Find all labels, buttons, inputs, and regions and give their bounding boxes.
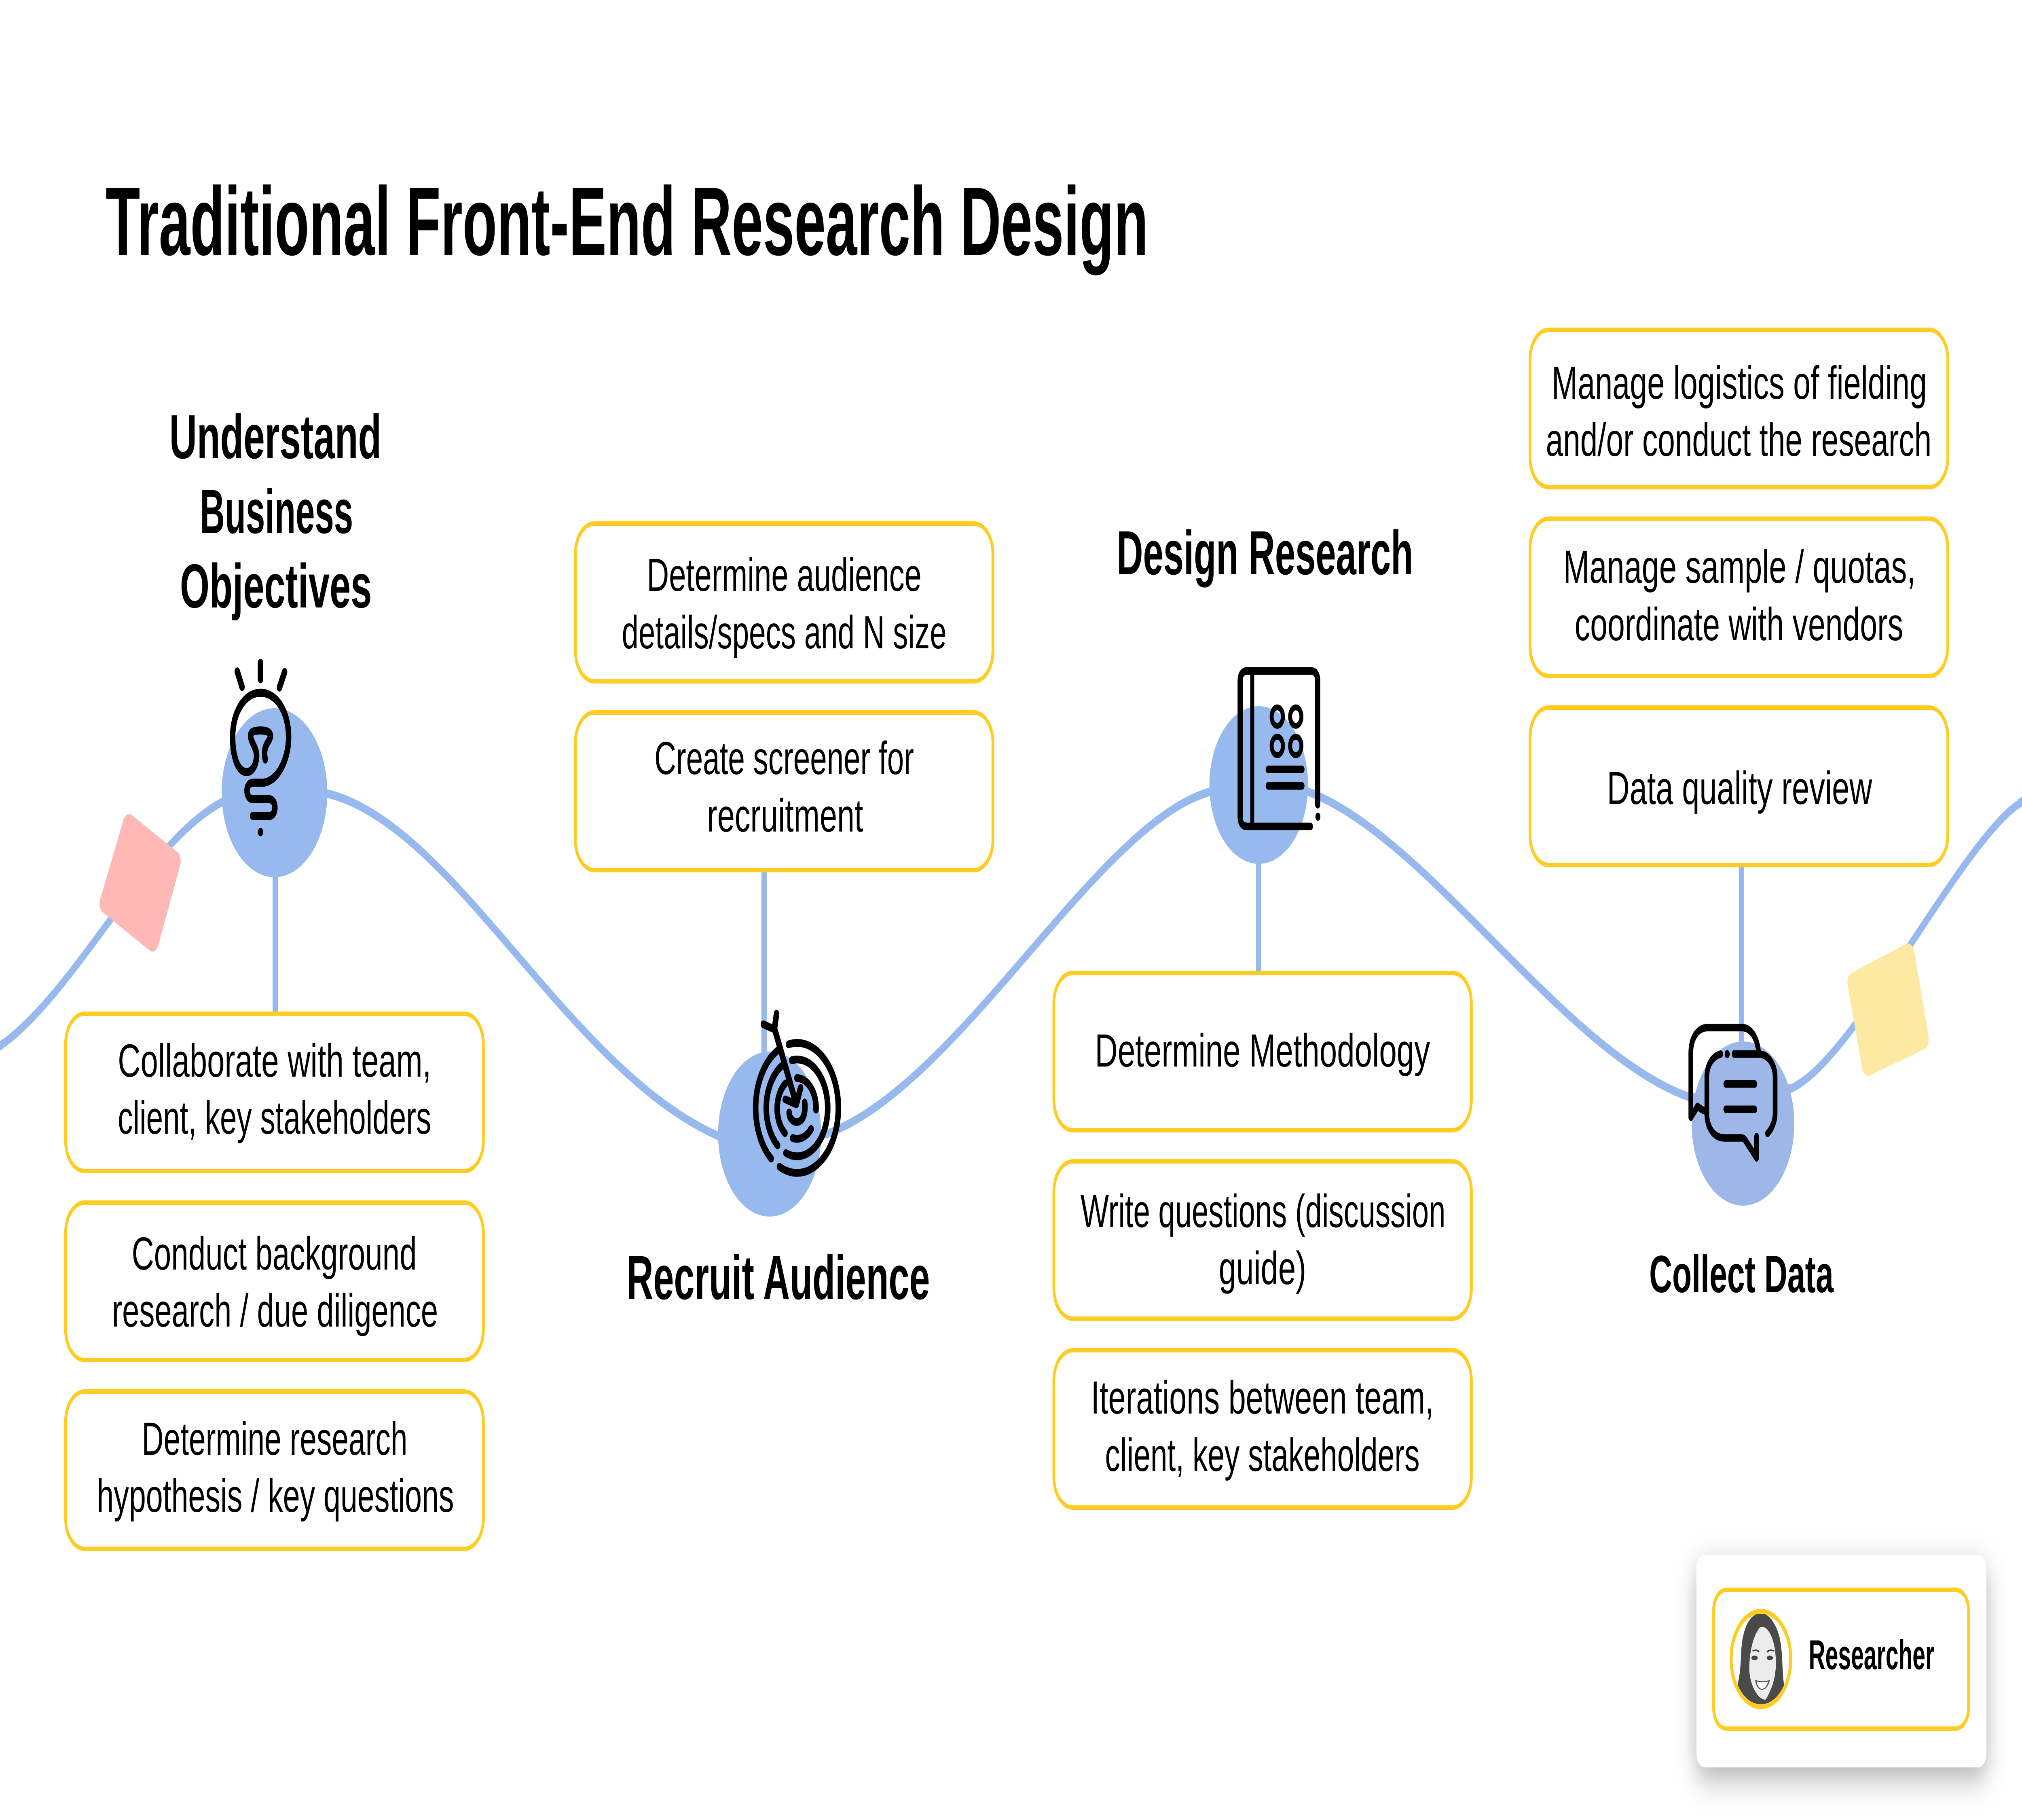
box: hypothesis bbox=[66, 1391, 483, 1549]
step node bbox=[718, 1052, 821, 1217]
icon: target with arrow bbox=[756, 1014, 838, 1173]
box: collaborate: client, key stakeholders bbox=[118, 1092, 431, 1144]
title: Traditional Front-End Research Design bbox=[106, 167, 1148, 275]
yellow sticky note bbox=[1854, 954, 1923, 1066]
step 4: collect data bbox=[1530, 330, 1948, 1304]
connector bbox=[271, 870, 279, 1013]
box: collaborate bbox=[66, 1014, 483, 1171]
box: screener: recruitment bbox=[707, 790, 863, 842]
step 1: understand business objectives bbox=[66, 402, 483, 1549]
box: write questions: guide) bbox=[1219, 1242, 1306, 1294]
box: hypothesis: Determine research bbox=[142, 1413, 408, 1465]
pink sticky note bbox=[106, 824, 174, 942]
box: sample: Manage sample / quotas, bbox=[1563, 541, 1916, 593]
label: Researcher bbox=[1808, 1632, 1934, 1678]
heading bbox=[169, 402, 381, 621]
box: background research bbox=[66, 1203, 483, 1360]
box: logistics: Manage logistics of fielding bbox=[1552, 357, 1927, 409]
step 3: design research bbox=[1054, 518, 1471, 1508]
heading: Design Research bbox=[1117, 518, 1413, 588]
heading: Collect Data bbox=[1649, 1244, 1834, 1304]
box: audience details: details/specs and N size bbox=[622, 607, 947, 658]
heading: Business bbox=[200, 477, 353, 546]
box: write questions bbox=[1054, 1162, 1471, 1318]
heading: Recruit Audience bbox=[626, 1243, 930, 1312]
box: write questions: Write questions (discussion bbox=[1081, 1185, 1445, 1237]
heading: Understand bbox=[169, 402, 381, 472]
connector bbox=[1254, 857, 1263, 973]
avatar bbox=[1731, 1611, 1791, 1709]
researcher legend card bbox=[1696, 1555, 1986, 1767]
box: data quality: Data quality review bbox=[1607, 762, 1872, 814]
box: audience details: Determine audience bbox=[647, 549, 922, 601]
connector bbox=[1737, 866, 1746, 1048]
icon: chat bubbles bbox=[1691, 1028, 1775, 1158]
box: background research: Conduct background bbox=[132, 1228, 417, 1280]
box: screener: Create screener for bbox=[654, 732, 914, 784]
connector bbox=[760, 870, 768, 1060]
box: methodology: Determine Methodology bbox=[1095, 1025, 1430, 1077]
heading: Objectives bbox=[180, 551, 372, 621]
step node bbox=[222, 708, 327, 877]
box: collaborate: Collaborate with team, bbox=[118, 1035, 431, 1087]
journey curve bbox=[0, 782, 2022, 1136]
box: methodology bbox=[1054, 973, 1471, 1130]
step 2: recruit audience bbox=[575, 523, 993, 1312]
box: data quality bbox=[1530, 708, 1948, 865]
box: sample: coordinate with vendors bbox=[1575, 599, 1903, 650]
box: iterations: client, key stakeholders bbox=[1105, 1429, 1420, 1481]
box: iterations: Iterations between team, bbox=[1091, 1372, 1434, 1424]
box: logistics: and/or conduct the research bbox=[1546, 414, 1931, 466]
icon: book bbox=[1240, 671, 1320, 826]
box: audience details bbox=[575, 523, 993, 681]
box: background research: research / due diligence bbox=[112, 1285, 438, 1337]
box: iterations bbox=[1054, 1350, 1471, 1508]
box: hypothesis: hypothesis / key questions bbox=[97, 1470, 454, 1522]
box: screener bbox=[575, 713, 993, 870]
step node bbox=[1210, 706, 1308, 864]
step node bbox=[1692, 1041, 1794, 1206]
icon: light bulb bbox=[233, 663, 289, 836]
box: sample bbox=[1530, 518, 1948, 676]
box: logistics bbox=[1530, 330, 1948, 487]
